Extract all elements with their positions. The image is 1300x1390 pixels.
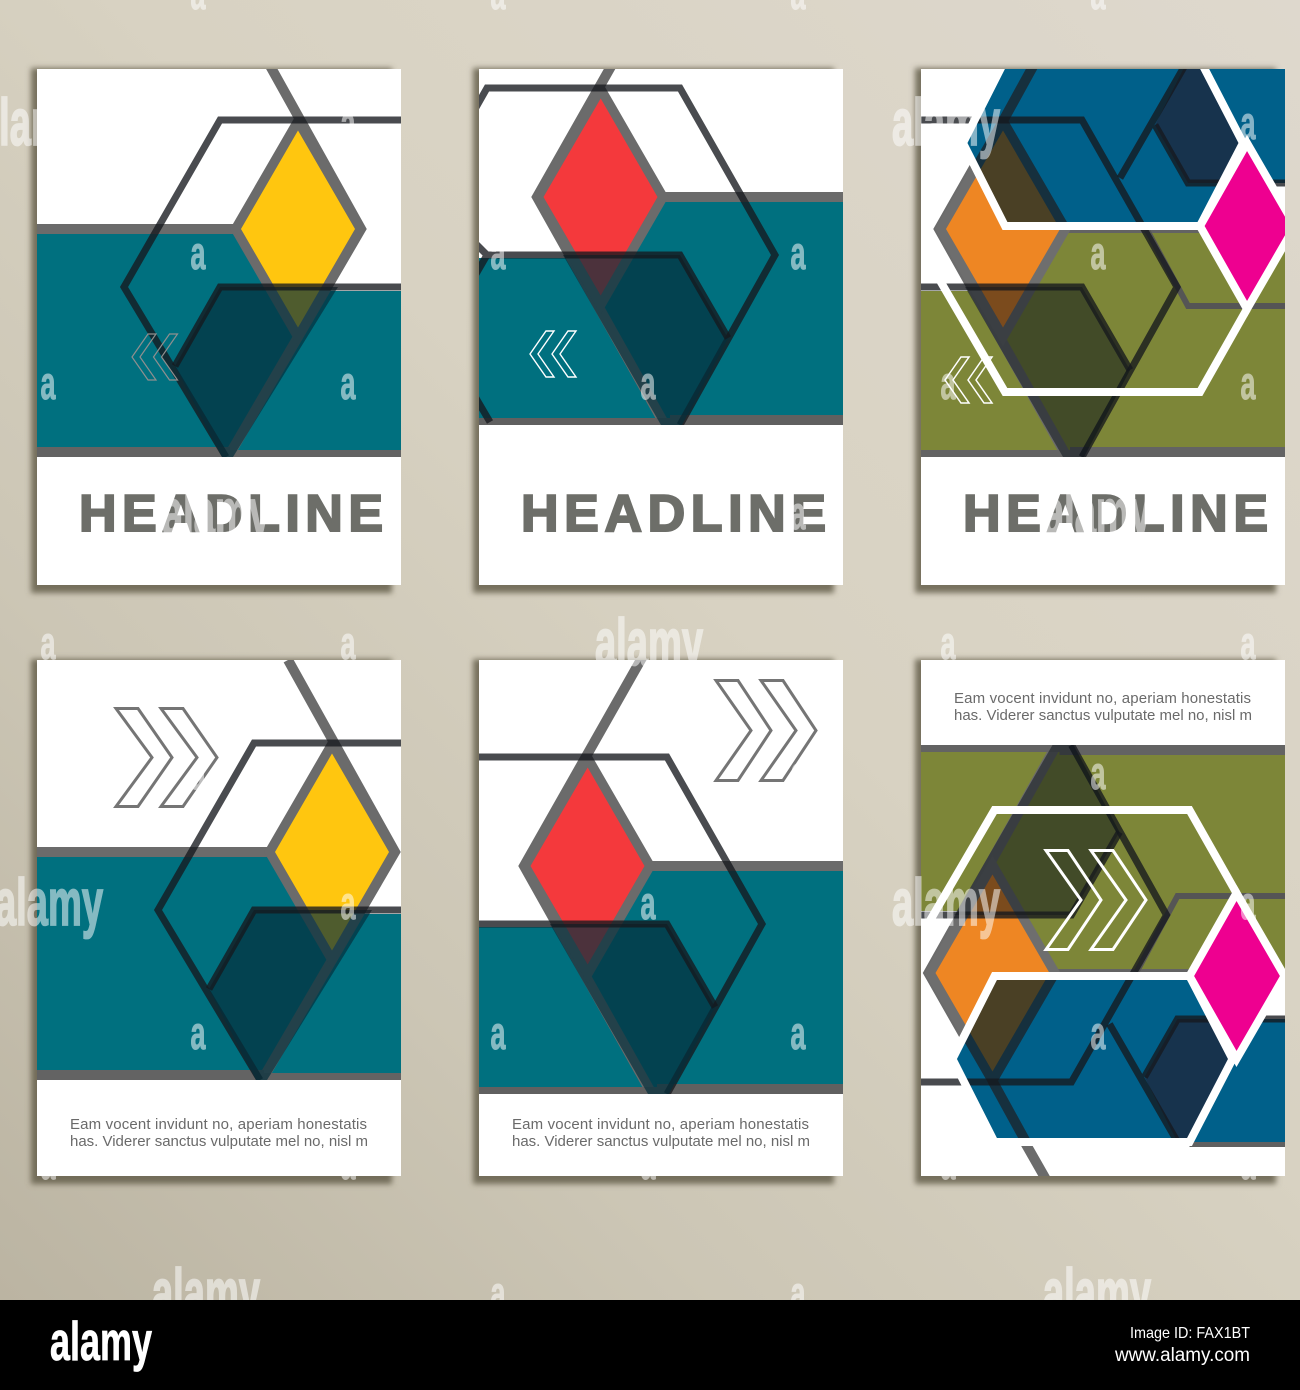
large watermarks: alamy xyxy=(162,475,270,549)
large watermarks xyxy=(0,85,1151,1329)
watermarks: a xyxy=(940,1137,956,1189)
panel: cover 3 orange and magenta xyxy=(921,69,1285,585)
body text: has. Viderer sanctus vulputate mel no, nisl m xyxy=(70,1133,368,1150)
red diamond xyxy=(538,89,663,305)
large watermarks: alamy xyxy=(1043,1255,1151,1329)
gray stripes xyxy=(933,165,1069,450)
watermarks: a xyxy=(1090,227,1106,279)
bottom band line xyxy=(37,447,401,457)
body text: Eam vocent invidunt no, aperiam honestatis xyxy=(70,1116,367,1133)
body text: has. Viderer sanctus vulputate mel no, nisl m xyxy=(512,1133,810,1150)
watermarks: a xyxy=(40,617,56,669)
large watermarks: alamy xyxy=(152,1255,260,1329)
footer bar xyxy=(0,1300,1300,1390)
footer area xyxy=(222,457,234,460)
watermarks: a xyxy=(340,357,356,409)
dark overlay shape xyxy=(563,255,728,425)
watermarks: a xyxy=(490,747,506,799)
brown overlap xyxy=(976,69,1067,222)
orange diamond xyxy=(944,176,1070,340)
watermarks: a xyxy=(1090,1007,1106,1059)
panel: cover 4 yellow diamond with text xyxy=(14,660,454,1176)
watermarks: a xyxy=(1240,97,1256,149)
navy outline xyxy=(1117,69,1285,186)
chevrons left xyxy=(945,357,992,403)
teal band xyxy=(37,234,401,450)
gray line on olive xyxy=(1147,230,1300,306)
watermarks: a xyxy=(1240,1137,1256,1189)
olive band xyxy=(921,233,1285,450)
blue hexagon xyxy=(968,69,1218,222)
artwork xyxy=(457,649,847,1094)
watermarks: a xyxy=(340,617,356,669)
chevrons right xyxy=(1046,850,1146,950)
dark lines xyxy=(921,116,1181,457)
dark overlay shape xyxy=(175,287,338,457)
panel: cover 1 yellow diamond xyxy=(37,69,401,585)
dark outline hexagon xyxy=(124,120,420,457)
watermarks: a xyxy=(490,1267,506,1319)
header area xyxy=(921,660,1285,745)
body text xyxy=(512,1116,810,1150)
watermarks: a xyxy=(40,357,56,409)
footer area xyxy=(37,1080,401,1176)
teal band xyxy=(470,202,860,420)
watermarks: a xyxy=(1240,617,1256,669)
watermarks: a xyxy=(640,357,656,409)
chevrons left xyxy=(132,334,178,380)
footer area xyxy=(479,1094,843,1176)
white hexagon outlines xyxy=(935,60,1247,392)
large watermarks: alamy xyxy=(595,605,703,679)
dark overlay shape xyxy=(965,287,1130,457)
watermarks: a xyxy=(1090,747,1106,799)
chevrons right xyxy=(716,680,816,780)
watermarks: a xyxy=(340,1137,356,1189)
watermarks: a xyxy=(190,227,206,279)
watermarks: a xyxy=(1240,877,1256,929)
magenta diamond xyxy=(1200,143,1295,309)
yellow diamond xyxy=(236,121,360,337)
inner dark outline xyxy=(470,238,728,422)
watermarks: a xyxy=(1240,357,1256,409)
gray stripes xyxy=(37,69,367,450)
watermarks: a xyxy=(640,877,656,929)
panel shadows xyxy=(31,68,1276,1184)
headline: HEADLINE xyxy=(79,485,383,543)
inner dark outline xyxy=(921,284,1133,370)
watermarks: a xyxy=(190,747,206,799)
image id: Image ID: FAX1BT xyxy=(1130,1325,1250,1342)
watermarks: a xyxy=(640,1137,656,1189)
watermarks: a xyxy=(790,227,806,279)
body text: Eam vocent invidunt no, aperiam honestatis xyxy=(954,690,1251,707)
body text xyxy=(954,690,1252,724)
body text: Eam vocent invidunt no, aperiam honestatis xyxy=(512,1116,809,1133)
footer area xyxy=(659,425,684,428)
panel: cover 6 flipped orange and magenta xyxy=(840,602,1300,1212)
artwork xyxy=(840,602,1300,1212)
watermarks: a xyxy=(340,97,356,149)
bottom band line xyxy=(470,415,860,425)
headline: HEADLINE xyxy=(521,485,826,543)
watermarks: a xyxy=(790,1267,806,1319)
band line xyxy=(921,230,1285,457)
chevrons right xyxy=(116,708,217,806)
watermarks: a xyxy=(790,1007,806,1059)
headline: HEADLINE xyxy=(963,485,1268,543)
watermarks: a xyxy=(640,97,656,149)
large watermarks: alamy xyxy=(892,865,1000,939)
body text xyxy=(70,1116,368,1150)
watermarks: a xyxy=(790,487,806,539)
large watermarks: alamy xyxy=(892,85,1000,159)
dark outline hexagon xyxy=(470,88,775,425)
brand logo text: alamy xyxy=(50,1310,152,1372)
panel: cover 2 red diamond xyxy=(479,69,843,585)
large watermarks: alamy xyxy=(0,865,103,939)
watermarks: a xyxy=(40,1137,56,1189)
watermarks: a xyxy=(940,617,956,669)
watermarks: a xyxy=(490,227,506,279)
watermarks: a xyxy=(490,487,506,539)
footer area xyxy=(1061,457,1086,460)
panel: cover 5 red diamond with text xyxy=(457,649,847,1176)
watermarks: a xyxy=(190,1007,206,1059)
navy shape xyxy=(1155,69,1238,183)
inner dark outline xyxy=(175,287,420,366)
chevrons left xyxy=(530,331,576,377)
gray stripes xyxy=(531,69,843,418)
website: www.alamy.com xyxy=(1114,1345,1250,1366)
large watermarks: alamy xyxy=(1043,475,1151,549)
watermarks: a xyxy=(790,747,806,799)
body text: has. Viderer sanctus vulputate mel no, nisl m xyxy=(954,707,1252,724)
watermarks: a xyxy=(340,877,356,929)
watermarks: a xyxy=(490,1007,506,1059)
watermarks: a xyxy=(940,357,956,409)
artwork xyxy=(14,660,454,1080)
blue outer area xyxy=(1209,69,1285,183)
